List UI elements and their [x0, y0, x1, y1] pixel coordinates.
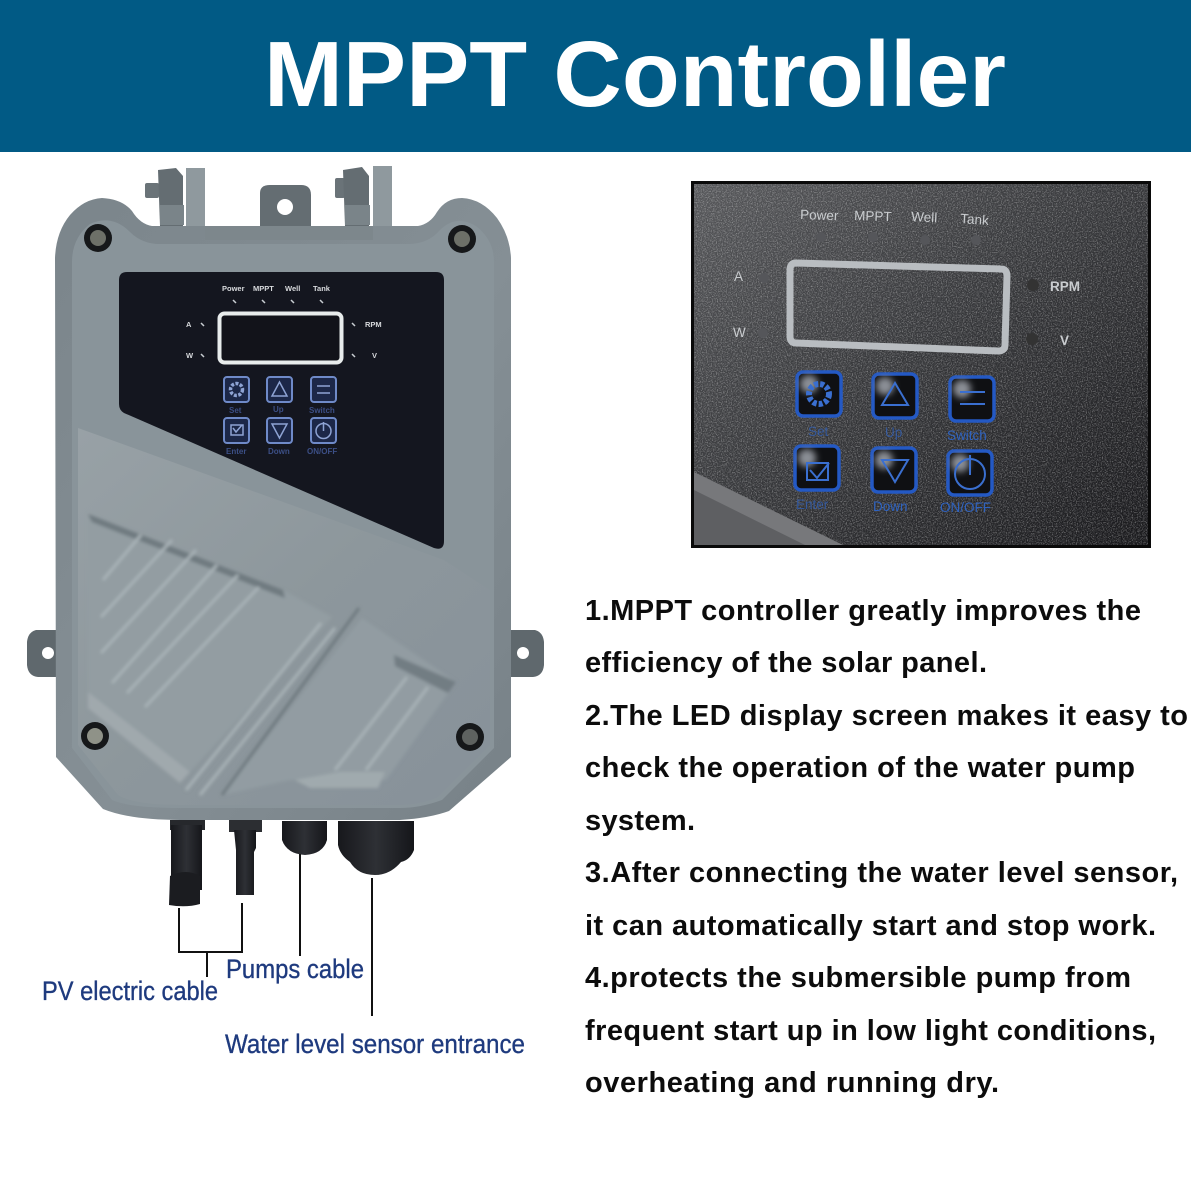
callout labels: Pumps cable: [226, 954, 364, 984]
key labels: Down: [268, 447, 290, 456]
close-up button labels: Enter: [796, 497, 829, 512]
text block: feature list: overheating and running dry.: [585, 1067, 999, 1099]
corner screws: [81, 224, 484, 751]
speckled surface: [694, 184, 1148, 545]
top tie bar: [205, 226, 373, 240]
mounting ears: [27, 630, 544, 677]
close-up button labels: Set: [808, 424, 829, 439]
close-up indicator labels: MPPT: [854, 208, 892, 224]
button highlights: [798, 375, 971, 472]
close-up indicator labels: W: [733, 325, 746, 340]
close-up button labels: [796, 424, 991, 515]
key labels: Switch: [309, 406, 335, 415]
close-up button labels: Down: [873, 499, 908, 514]
close-up button icons: [807, 383, 985, 489]
photo border: [692, 182, 1150, 546]
close-up indicator labels: A: [734, 269, 743, 284]
callout labels: PV electric cable: [42, 976, 218, 1006]
text block: feature list: efficiency of the solar panel.: [585, 647, 987, 679]
text block: feature list: 3.After connecting the water level sensor,: [585, 857, 1178, 889]
indicator labels: Well: [285, 284, 300, 293]
front plate: [78, 428, 490, 805]
display panel: [119, 272, 444, 549]
close-up display frame: [790, 263, 1007, 351]
close-up indicator labels: V: [1060, 333, 1069, 348]
indicator labels: RPM: [365, 320, 382, 329]
text block: feature list: it can automatically start and stop work.: [585, 910, 1156, 942]
indicator labels: V: [372, 351, 377, 360]
callout labels: [42, 954, 525, 1059]
close-up indicator labels: Power: [800, 207, 839, 223]
key labels: Enter: [226, 447, 246, 456]
title: MPPT Controller: [264, 22, 1006, 126]
key labels: ON/OFF: [307, 447, 337, 456]
ribbed recess left: [88, 514, 335, 795]
text block: feature list: check the operation of the water pump: [585, 752, 1135, 784]
panel: controller device photo: [27, 166, 544, 906]
text block: feature list: 1.MPPT controller greatly improves the: [585, 595, 1141, 627]
text block: feature list: [585, 595, 1188, 1099]
close-up indicator labels: [733, 207, 1080, 348]
close-up indicator labels: Tank: [960, 211, 990, 228]
close-up buttons: [795, 372, 994, 495]
close-up button labels: Up: [885, 425, 902, 440]
indicator labels: W: [186, 351, 194, 360]
keypad: [224, 377, 336, 443]
top clamps and tab: [145, 166, 392, 240]
callout labels: Water level sensor entrance: [225, 1029, 525, 1059]
text block: feature list: system.: [585, 805, 695, 837]
text block: feature list: 4.protects the submersible pump from: [585, 962, 1131, 994]
ribbed recess right: [222, 608, 456, 795]
LED ticks: [201, 300, 355, 357]
close-up button labels: ON/OFF: [940, 500, 991, 515]
grey enclosure corner: [694, 472, 843, 545]
key icons: [230, 382, 331, 438]
text block: feature list: frequent start up in low light conditions,: [585, 1015, 1156, 1047]
key labels: [226, 405, 337, 456]
indicator labels: Power: [222, 284, 245, 293]
close-up LEDs: [758, 232, 1039, 345]
panel: keypad close-up photo: [692, 182, 1150, 546]
key labels: Up: [273, 405, 284, 414]
close-up indicator labels: RPM: [1050, 279, 1080, 294]
indicator labels: [186, 284, 382, 360]
enclosure rim: [72, 220, 494, 808]
indicator labels: Tank: [313, 284, 331, 293]
indicator labels: MPPT: [253, 284, 274, 293]
enclosure body: [55, 198, 511, 820]
title banner: [0, 0, 1191, 152]
close-up indicator labels: Well: [911, 209, 938, 225]
LED display frame: [220, 314, 342, 362]
text block: feature list: 2.The LED display screen makes it easy to: [585, 700, 1188, 732]
key labels: Set: [229, 406, 242, 415]
callout lines: [179, 854, 372, 1016]
close-up button labels: Switch: [947, 428, 987, 443]
indicator labels: A: [186, 320, 192, 329]
cable connectors: [169, 820, 414, 906]
